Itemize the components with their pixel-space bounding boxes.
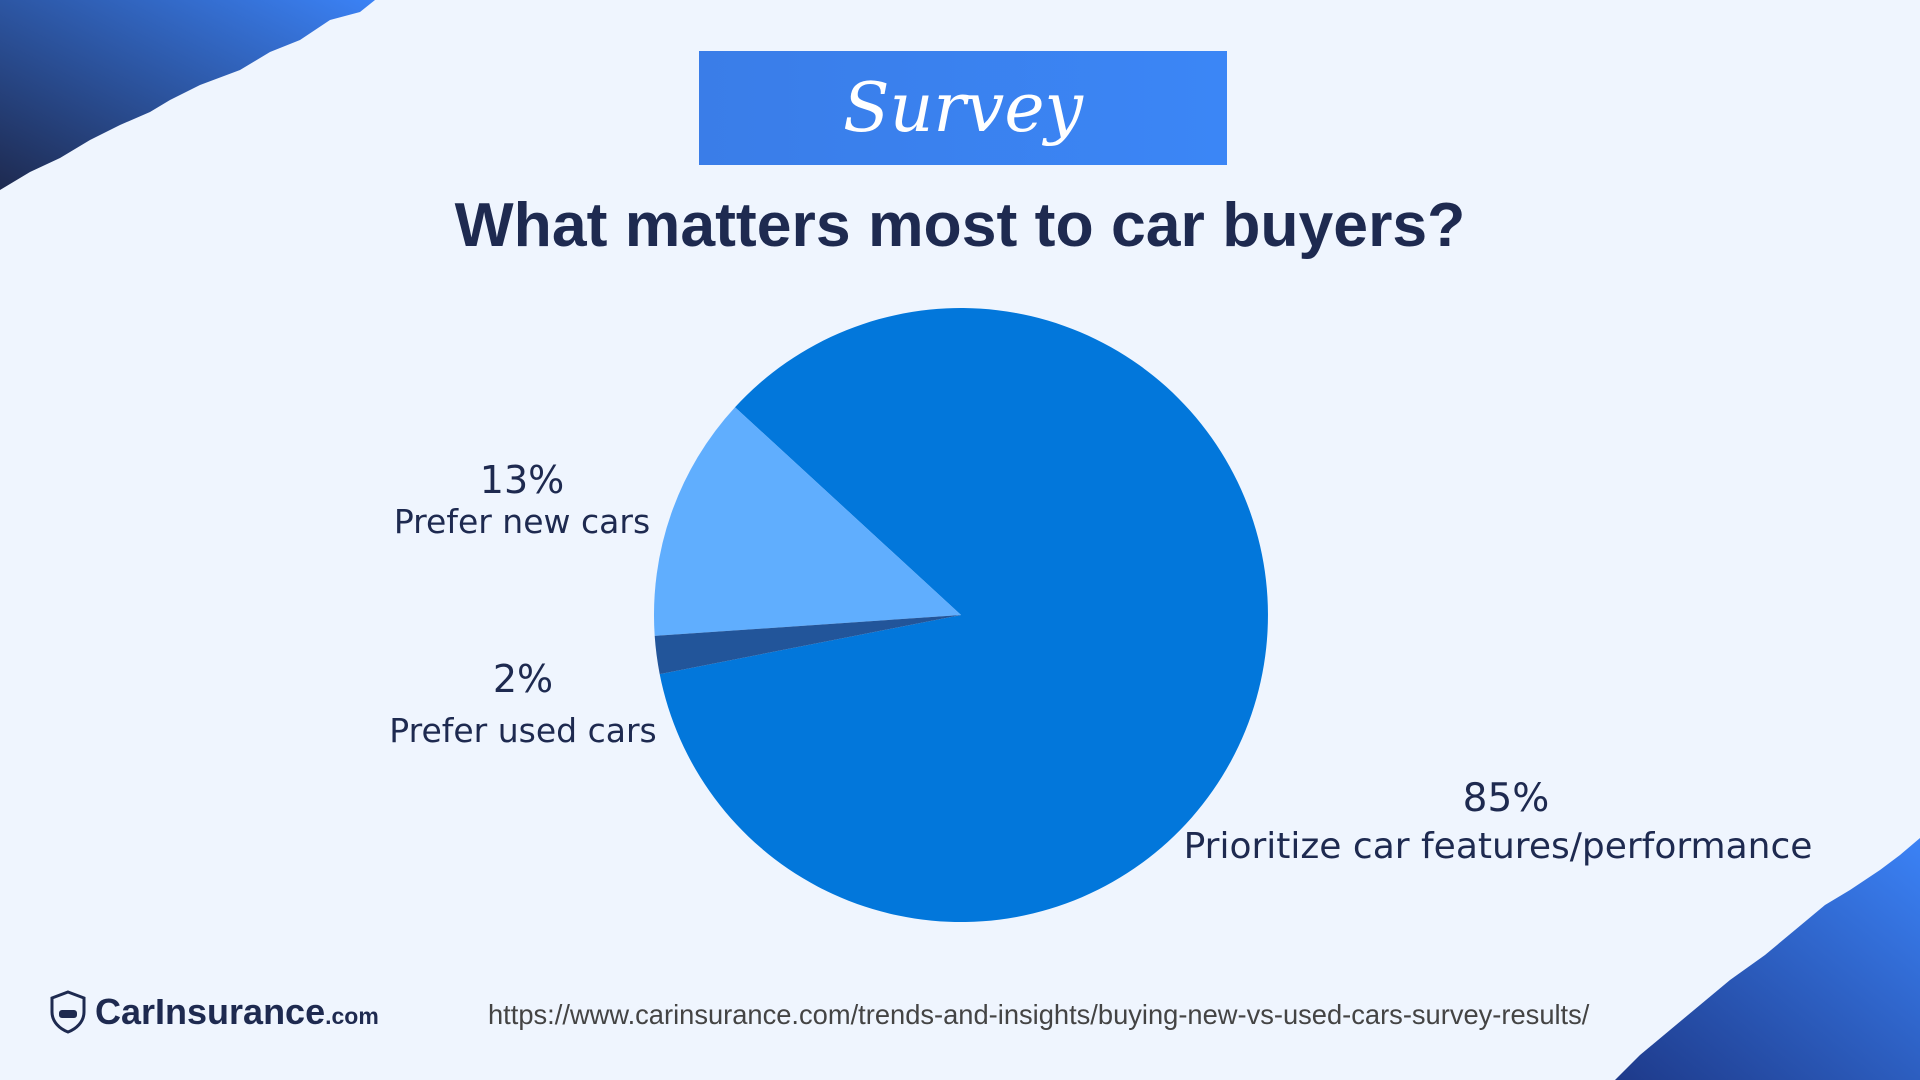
title: What matters most to car buyers? <box>455 190 1465 260</box>
banner: Survey <box>699 51 1227 165</box>
logo <box>50 990 379 1034</box>
label: prefer new: Prefer new cars <box>394 502 650 541</box>
banner: Survey: Survey <box>843 68 1083 148</box>
decoration: bottom-right corner <box>1615 838 1920 1080</box>
label: 2%: 2% <box>493 657 553 701</box>
logo: .com <box>325 1002 379 1028</box>
logo: CarInsurance <box>95 991 325 1032</box>
decoration: top-left corner <box>0 0 375 190</box>
label: prefer used: Prefer used cars <box>389 711 657 750</box>
label: prioritize: Prioritize car features/performance <box>1184 826 1812 867</box>
label: 85%: 85% <box>1463 776 1549 821</box>
source url: https://www.carinsurance.com/trends-and-insights/buying-new-vs-used-cars-survey-results/ <box>488 999 1589 1030</box>
label: 13%: 13% <box>480 458 564 502</box>
